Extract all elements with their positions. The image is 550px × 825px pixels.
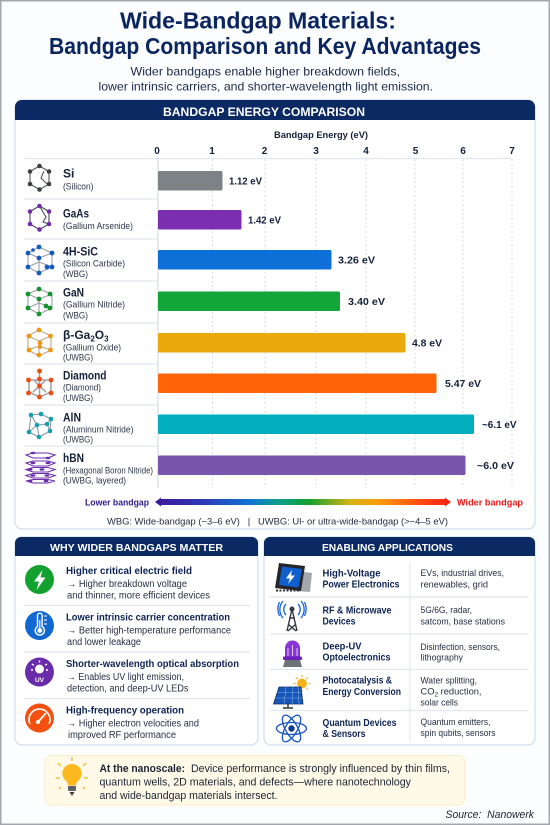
item: lower intrinsic carrier concentration: → Better high-temperature performance [67,626,232,636]
bar: beta-Ga2O3 [158,333,442,352]
application: deep-UV optoelectronics: Deep-UV [322,642,362,652]
axis tick labels: 1 [209,146,215,157]
icon: GaN crystal [26,287,52,316]
bar chart [158,171,516,475]
bar: hBN [158,456,514,475]
row label: hBN: hBN [63,451,84,465]
item: shorter-wavelength optical absorption: detection, and deep-UV LEDs [67,684,189,694]
axis tick labels: 4 [363,146,369,157]
row label: beta-Ga2O3: (Gallium Oxide) [63,342,121,352]
row label: GaAs [63,206,133,231]
application: photocatalysis and energy conversion: Photocatalysis & [322,676,392,686]
row label: Diamond: (UWBG) [63,393,93,403]
panel header: why wider bandgaps matter [15,537,258,556]
panel: bandgap energy comparison [15,100,535,529]
bar: Si [158,171,262,190]
application: photocatalysis and energy conversion: CO [420,686,434,696]
application: quantum devices and sensors: spin qubits, sensors [420,728,496,738]
row label: 4H-SiC [63,244,125,279]
application: high-voltage power electronics [275,563,504,592]
bar: GaAs [158,210,281,230]
icon: GaAs crystal [28,204,51,232]
row label: beta-Ga2O3: O [95,328,104,342]
bar: GaN: 3.40 eV [348,296,385,308]
bar: GaAs: 1.42 eV [248,214,281,226]
item: high-frequency operation [25,704,199,741]
axis tick labels: 2 [262,146,268,157]
icon: UV beacon [283,640,302,667]
icon: UV sun: UV [35,677,45,684]
application: photocatalysis and energy conversion: reduction, [438,686,482,696]
application: quantum devices and sensors: Quantum Devices [322,718,397,729]
title [49,8,481,59]
application: deep-UV optoelectronics: Disinfection, sensors, [420,642,500,652]
icon: hBN layers [26,452,55,483]
application: deep-UV optoelectronics: Optoelectronics [322,652,391,664]
row label: GaN: (WBG) [63,310,88,320]
row label: Diamond: (Diamond) [63,382,101,392]
axis tick labels: 0 [154,146,160,157]
spectrum arrow [85,498,523,508]
application: high-voltage power electronics: High-Voltage [322,568,381,580]
application: high-voltage power electronics: EVs, industrial drives, [420,568,504,578]
bar: 4H-SiC [158,250,375,270]
source: Source: Nanowerk [446,809,534,821]
icon: 4H-SiC crystal [26,245,54,275]
row label: hBN [63,451,153,486]
application: quantum devices and sensors [276,713,496,744]
axis tick labels: 3 [313,146,319,157]
application: photocatalysis and energy conversion: solar cells [420,698,458,708]
wider bandgap label: Wider bandgap [457,498,523,508]
icon: lightning bolt [25,565,54,594]
application: photocatalysis and energy conversion: Water splitting, [420,676,477,686]
subtitle: Wider bandgaps enable higher breakdown fields, [130,64,400,78]
row label: GaN [63,286,125,320]
application: deep-UV optoelectronics: lithography [420,652,463,662]
row label: AlN: AlN [63,410,81,424]
item: high-frequency operation: improved RF performance [68,730,177,741]
row label: beta-Ga2O3: (UWBG) [63,352,93,362]
application: RF and microwave devices: RF & Microwave [322,606,392,616]
axis tick labels: 7 [509,146,515,157]
item: lower intrinsic carrier concentration: Lower intrinsic carrier concentration [66,612,230,624]
application: high-voltage power electronics: Power Electronics [322,580,400,590]
icon: radio tower [278,601,306,631]
axis tick labels: 5 [413,146,419,157]
panel: why wider bandgaps matter [15,537,258,745]
row label: Si: (Silicon) [63,182,94,192]
row label: AlN: (Aluminum Nitride) [63,424,134,434]
callout: at the nanoscale: quantum wells, 2D materials, and defects—where nanotechnology [100,776,412,788]
icon: solar panel and sun [274,675,310,708]
title: Bandgap Comparison and Key Advantages [49,33,481,59]
callout: at the nanoscale: At the nanoscale: [100,763,185,775]
subtitle: lower intrinsic carriers, and shorter-wavelength light emission. [98,80,433,94]
row label: beta-Ga2O3 [63,328,121,362]
item: higher critical electric field: and thinner, more efficient devices [67,590,210,602]
icon: power chip [275,563,312,592]
item: shorter-wavelength optical absorption: Shorter-wavelength optical absorption [66,659,239,670]
bar: GaN [158,292,385,311]
row label: AlN [63,410,134,444]
application: high-voltage power electronics: renewables, grid [420,580,488,590]
callout: at the nanoscale: and wide-bandgap materials intersect. [100,790,278,802]
application: photocatalysis and energy conversion: Energy Conversion [322,687,401,698]
application: deep-UV optoelectronics [283,640,500,667]
row label: GaAs: (Gallium Arsenide) [63,221,133,231]
lower bandgap label: Lower bandgap [85,498,149,508]
bar: AlN: ~6.1 eV [482,419,516,431]
item: higher critical electric field: → Higher breakdown voltage [67,579,188,590]
icon: Si crystal [28,164,51,192]
panel header: why wider bandgaps matter: WHY WIDER BANDGAPS MATTER [50,542,223,554]
callout: at the nanoscale: Device performance is strongly influenced by thin films, [191,763,450,775]
item: lower intrinsic carrier concentration: and lower leakage [67,637,142,648]
row label: Si: Si [63,166,74,180]
row label: GaN: GaN [63,286,84,300]
bar: AlN [158,414,516,434]
bar: beta-Ga2O3: 4.8 eV [412,338,442,350]
item: higher critical electric field [25,565,210,602]
row label: beta-Ga2O3: β-Ga [63,328,90,342]
row label: Si [63,166,94,192]
bar: Diamond: 5.47 eV [445,378,481,390]
row label: 4H-SiC: (WBG) [63,269,88,279]
application: quantum devices and sensors: & Sensors [322,729,366,740]
icon: UV sun [25,658,54,686]
callout: at the nanoscale [45,756,465,805]
item: high-frequency operation: → Higher electron velocities and [67,718,199,730]
panel header: bandgap energy comparison [15,100,535,120]
icon: light bulb [56,757,88,796]
item: shorter-wavelength optical absorption: → Enables UV light emission, [67,672,184,683]
axis tick labels: 6 [460,146,466,157]
icon: AlN crystal [27,412,53,439]
row label: hBN: (UWBG, layered) [63,476,126,486]
bar: Si: 1.12 eV [229,176,262,188]
application: photocatalysis and energy conversion: 2 [434,692,438,698]
subtitle [98,64,433,94]
application: quantum devices and sensors: Quantum emitters, [420,717,490,727]
bar: 4H-SiC: 3.26 eV [338,254,375,266]
bar: hBN: ~6.0 eV [477,460,514,472]
row label: Diamond [63,368,106,403]
row label: beta-Ga2O3: 2 [90,334,95,344]
icon: gauge [25,704,54,732]
icon: atom [276,713,306,744]
icon: thermometer [25,611,54,640]
application: RF and microwave devices [278,601,505,631]
bar: Diamond [158,374,481,393]
application: photocatalysis and energy conversion [274,675,482,708]
row label: hBN: (Hexagonal Boron Nitride) [63,466,153,476]
item: shorter-wavelength optical absorption [25,658,239,694]
legend note: WBG: Wide-bandgap (~3–6 eV) | UWBG: Ul- or ultra-wide-bandgap (>~4–5 eV) [107,516,448,526]
row label: GaAs: GaAs [63,206,89,220]
icon: Diamond crystal [26,369,53,399]
row label: 4H-SiC: 4H-SiC [63,244,98,258]
panel: enabling applications [264,537,535,745]
axis tick labels [154,146,515,157]
axis title: Bandgap Energy (eV) [274,130,368,141]
application: RF and microwave devices: Devices [322,616,356,628]
panel header: bandgap energy comparison: BANDGAP ENERGY COMPARISON [163,107,365,119]
row label: GaN: (Gallium Nitride) [63,300,125,310]
panel header: enabling applications: ENABLING APPLICATIONS [322,542,453,554]
application: RF and microwave devices: satcom, base stations [420,616,505,626]
item: lower intrinsic carrier concentration [25,611,232,648]
row label: AlN: (UWBG) [63,434,93,444]
row label: beta-Ga2O3: 3 [104,334,109,344]
title: Wide-Bandgap Materials: [120,8,396,34]
application: RF and microwave devices: 5G/6G, radar, [420,605,472,615]
icon: beta-Ga2O3 crystal [27,328,53,357]
row label: 4H-SiC: (Silicon Carbide) [63,258,125,268]
item: higher critical electric field: Higher critical electric field [66,566,192,577]
item: high-frequency operation: High-frequency operation [66,706,184,716]
panel header: enabling applications [264,537,535,556]
row label: Diamond: Diamond [63,368,106,382]
